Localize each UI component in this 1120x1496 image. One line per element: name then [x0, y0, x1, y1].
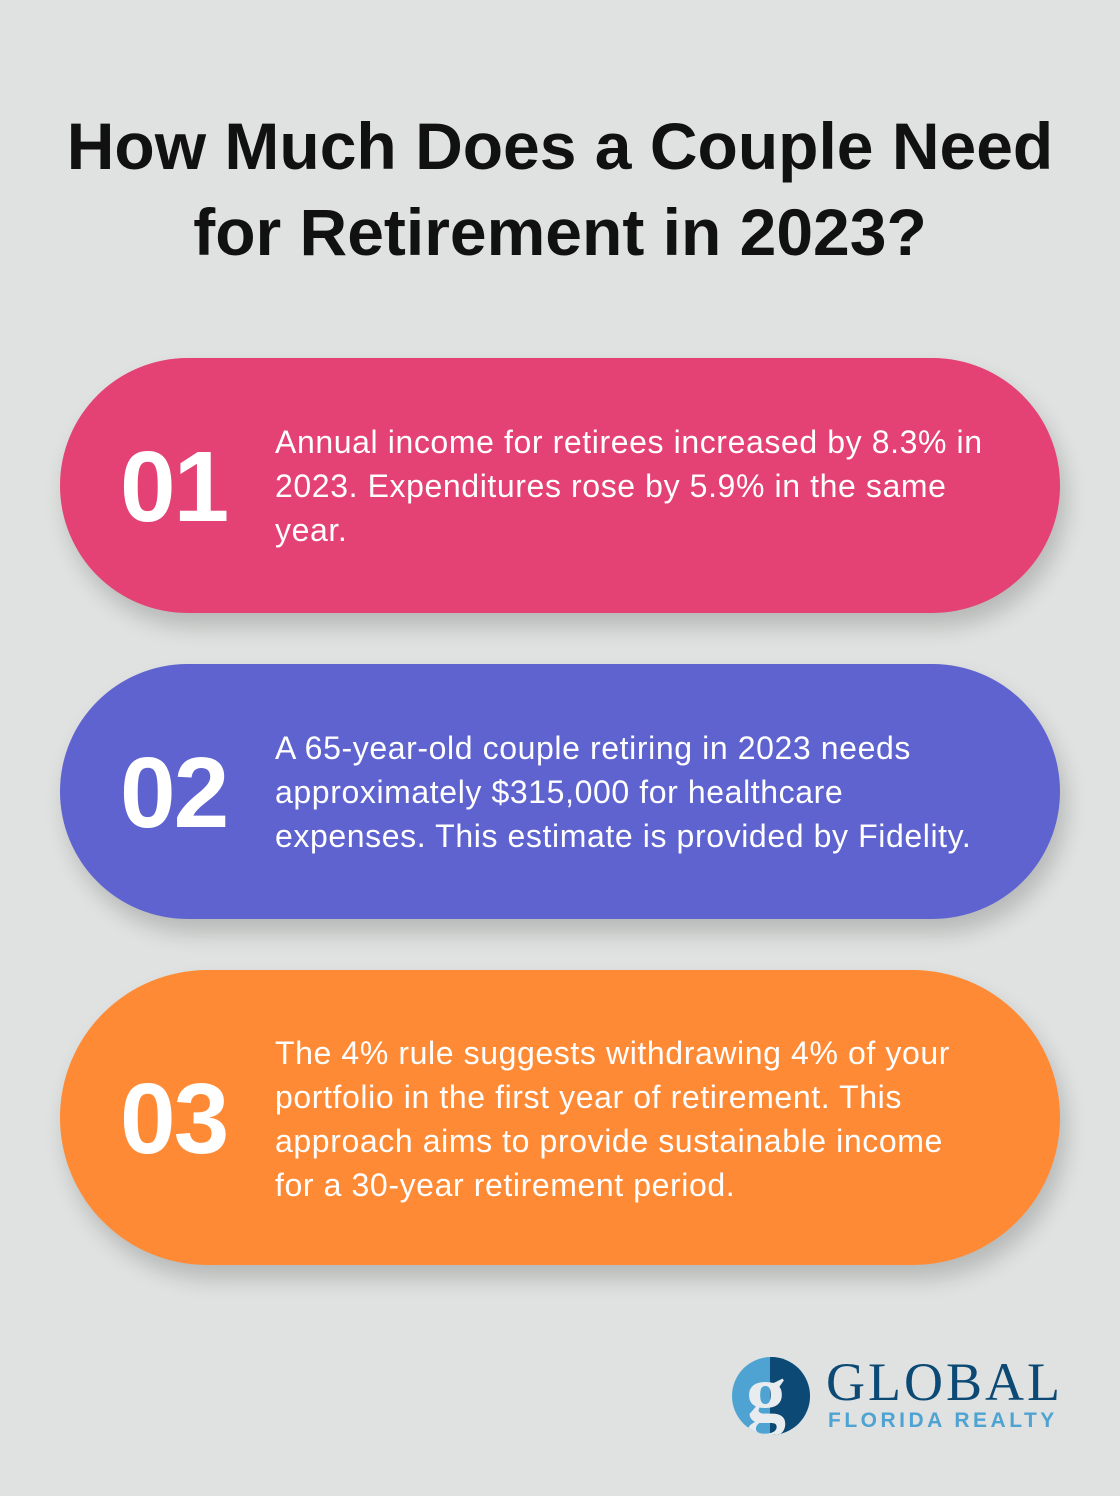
icon: g circle: [732, 1357, 810, 1435]
text 01: year.: [275, 512, 347, 548]
title: How Much Does a Couple Need: [67, 109, 1053, 183]
logo text GLOBAL: GLOBAL: [826, 1352, 1063, 1412]
text 02: [275, 730, 971, 854]
title: [67, 109, 1053, 269]
logo text FLORIDA REALTY: FLORIDA REALTY: [828, 1409, 1058, 1432]
panel: 01: [60, 358, 1060, 613]
text 03: approach aims to provide sustainable income: [275, 1123, 943, 1159]
number 01: 01: [120, 431, 227, 543]
text 03: [275, 1035, 950, 1203]
text 01: [275, 424, 983, 548]
text 02: A 65-year-old couple retiring in 2023 needs: [275, 730, 911, 766]
panel: 02: [60, 664, 1060, 919]
text 03: for a 30-year retirement period.: [275, 1167, 735, 1203]
text 03: portfolio in the first year of retirement. This: [275, 1079, 902, 1115]
text 02: expenses. This estimate is provided by Fidelity.: [275, 818, 971, 854]
text 02: approximately $315,000 for healthcare: [275, 774, 843, 810]
panel: 03: [60, 970, 1060, 1265]
number 03: 03: [120, 1063, 227, 1175]
title: for Retirement in 2023?: [193, 195, 927, 269]
number 02: 02: [120, 737, 227, 849]
text 01: Annual income for retirees increased by 8.3% in: [275, 424, 983, 460]
logo: [732, 1352, 1063, 1435]
text 03: The 4% rule suggests withdrawing 4% of your: [275, 1035, 950, 1071]
text 01: 2023. Expenditures rose by 5.9% in the same: [275, 468, 947, 504]
